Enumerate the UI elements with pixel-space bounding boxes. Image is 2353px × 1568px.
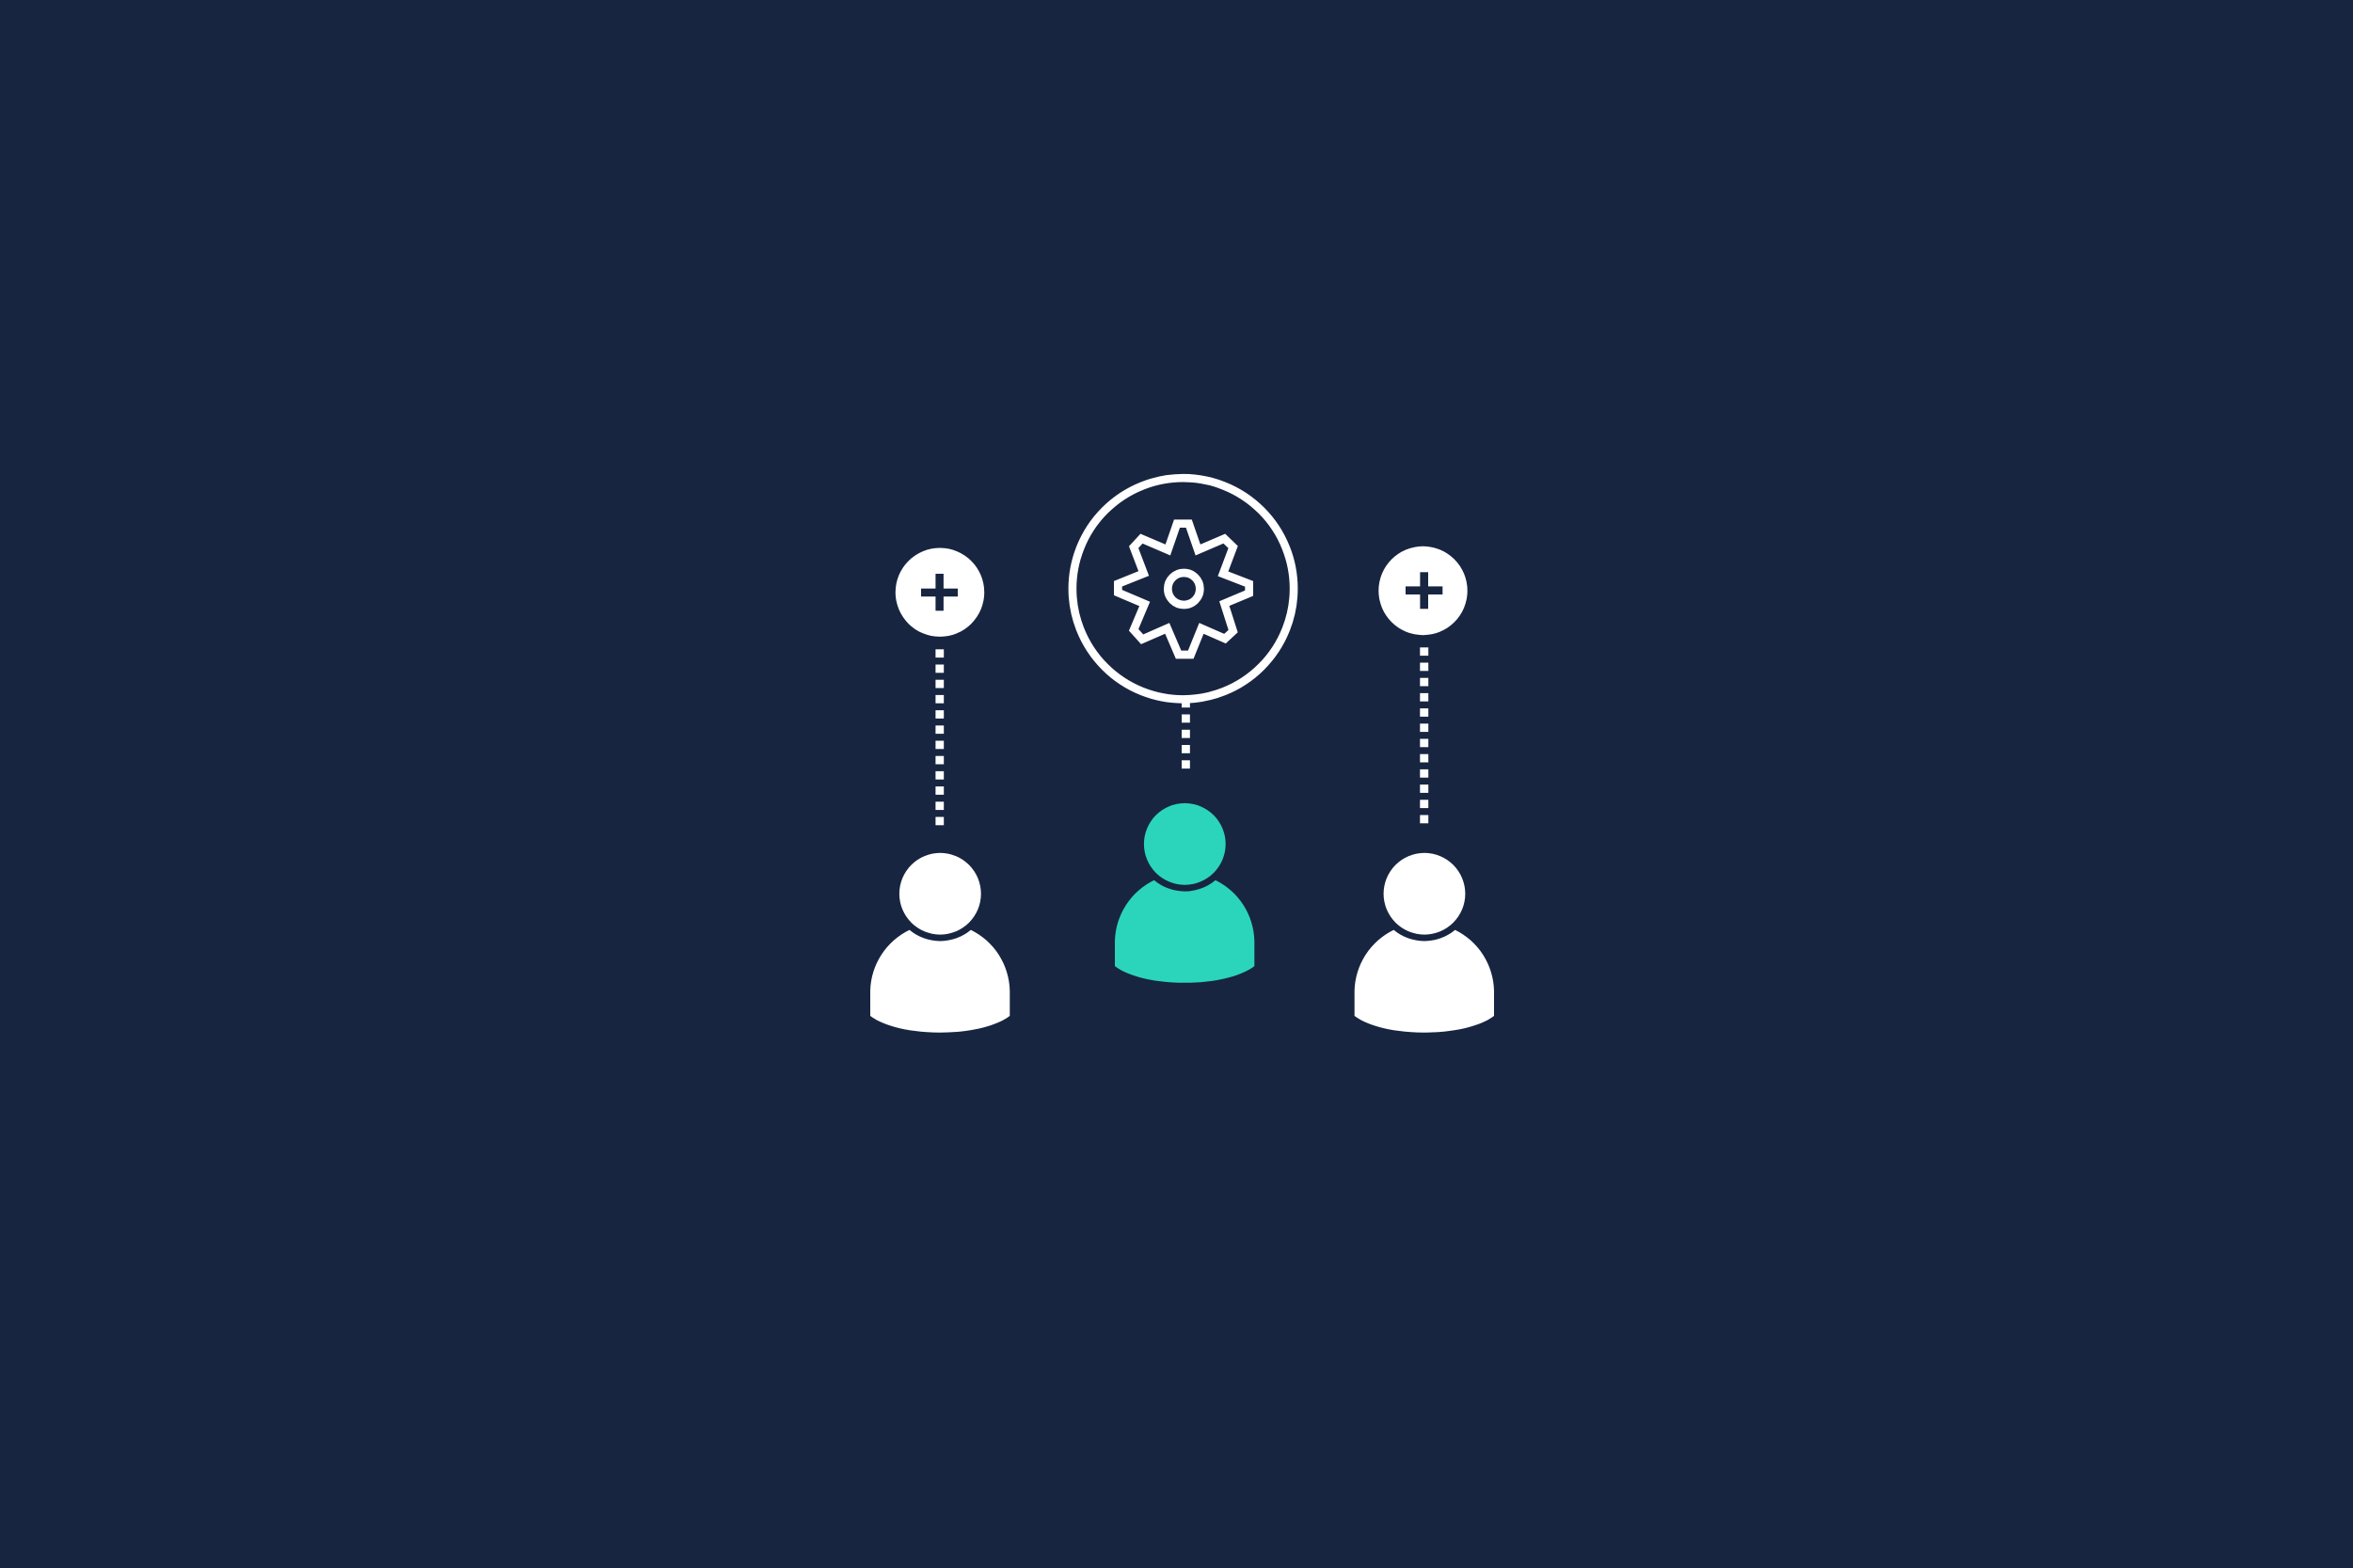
- icon: right plus badge: [1378, 546, 1468, 635]
- icon: left person: [870, 853, 1010, 1033]
- icon: left plus badge: [896, 547, 984, 637]
- icon: centre ring: [1073, 478, 1294, 699]
- right dotted connector: [1420, 647, 1428, 823]
- icon: right person: [1355, 853, 1494, 1033]
- centre dotted connector: [1182, 699, 1190, 768]
- icon: centre teal person: [1115, 803, 1254, 983]
- icon: gear: [1118, 524, 1249, 655]
- left dotted connector: [935, 649, 944, 825]
